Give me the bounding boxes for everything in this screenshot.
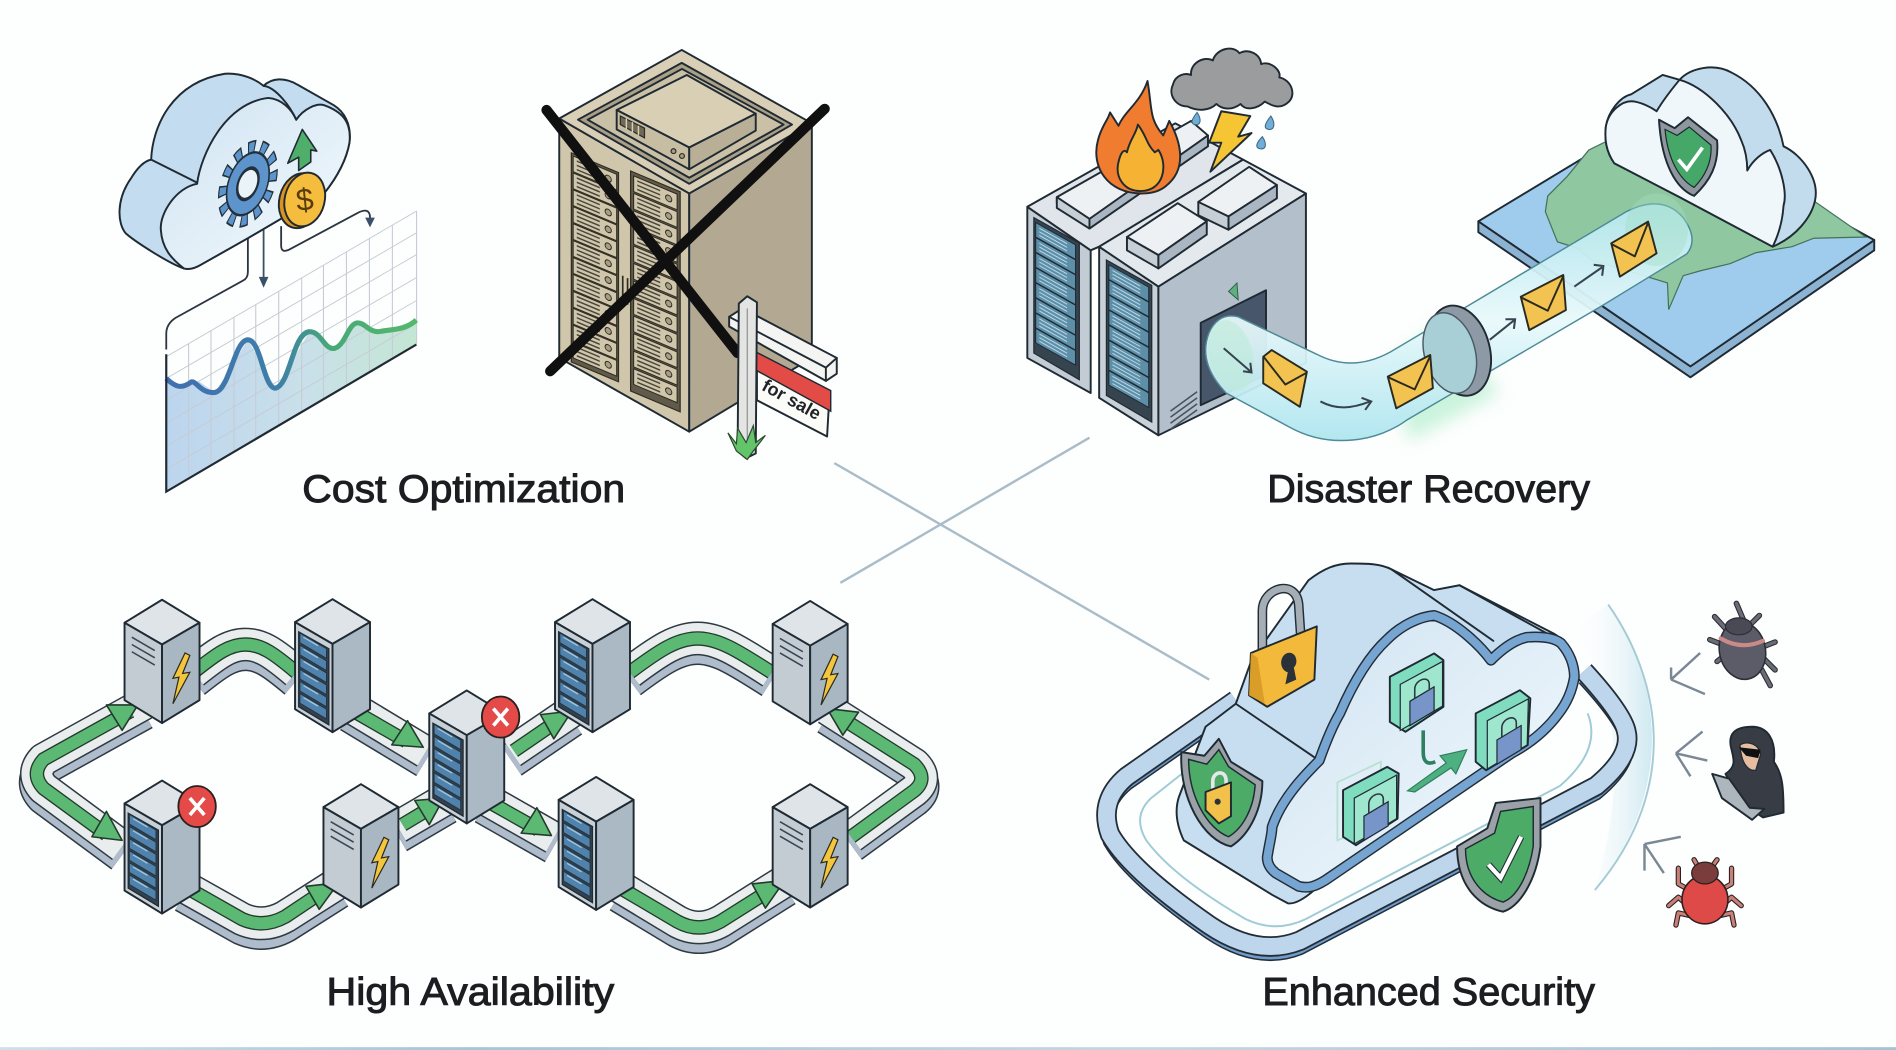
icon: rain drops [1192,112,1274,149]
icon: threat arrows [1644,653,1707,873]
green data flow outline [37,638,921,927]
network track under layer [37,647,921,936]
icon: hooded hacker with laptop [1712,727,1784,820]
icon: encrypted tiles [1337,653,1530,845]
icon: storm cloud [1171,49,1292,110]
panel: disaster recovery [1027,49,1874,511]
server: power bottom right [773,784,848,907]
bottom edge strip [0,1047,1896,1050]
central cross divider [834,438,1209,680]
server: power top right [773,601,848,724]
icon: recovery cloud [1605,67,1816,247]
icon: fire [1096,81,1180,193]
icon: data movement arrow [1407,730,1467,792]
icon: security cloud [1177,563,1577,903]
icon: shield with check [1457,798,1540,912]
server: power top left [125,600,200,723]
network track top [37,638,921,927]
icon: dollar coin [273,168,331,233]
icon: protective arc field [1572,605,1654,890]
rooftop boxes [1057,121,1277,268]
icon: flow arrows [1224,265,1603,410]
heading: cost optimization: Cost Optimization [302,468,625,511]
icon: dollar coin: $ [294,182,315,218]
icon: for sale sign [728,296,837,459]
server: rack upper right [555,599,630,732]
icon: envelopes [1263,222,1657,408]
server: failed rack centre [429,690,504,823]
icon: gray bug [1710,603,1775,686]
icon: secure ring [1106,671,1627,954]
panel: enhanced security [1106,563,1784,1014]
server: power lower [323,784,398,907]
icon: red bug [1669,860,1741,925]
right door rack units [631,171,680,412]
network track fill [37,647,921,936]
icon: lightning bolt [1209,111,1252,172]
chart: cost trend on isometric grid [166,211,417,492]
icon: black X through server [547,109,825,371]
left door rack units [571,153,618,382]
icon: gear [224,138,272,230]
icon: upward arrow [288,129,317,170]
icon: crossed-out server rack [559,50,812,432]
server: rack lower right [559,777,634,910]
icon: glowing transfer pipe [1201,193,1692,441]
appliance on top of rack [617,75,756,169]
network track surface [37,638,921,927]
heading: high availability: High Availability [326,971,615,1014]
panel: high availability [37,599,921,1014]
green data flow [37,638,921,927]
server: failed rack bottom left [125,781,200,914]
grass tuft [728,426,765,459]
flow arrowheads [92,705,859,909]
sign text: for sale [759,375,824,424]
icon: failure badge left [178,786,216,827]
icon: map slab [1478,117,1874,377]
icon: cloud [120,74,350,269]
icon: shield with lock [1181,739,1262,846]
icon: padlock [1249,589,1317,707]
icon: shield with check [1659,117,1717,196]
icon: data center towers [1027,121,1306,435]
heading: disaster recovery: Disaster Recovery [1267,468,1591,511]
heading: enhanced security: Enhanced Security [1262,971,1596,1014]
icon: failure badge centre [482,696,519,738]
icon: pipe collar [1415,298,1501,403]
server: rack top [295,599,370,732]
panel: cost optimization [120,50,837,511]
